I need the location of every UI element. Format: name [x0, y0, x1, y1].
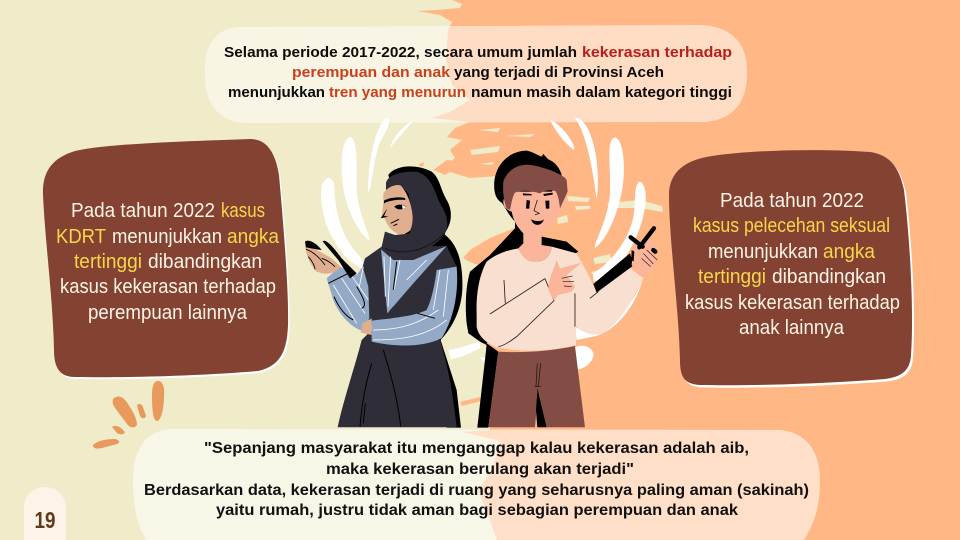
panel: right sexual harassment callout: kasus kekerasan terhadap — [685, 291, 900, 314]
icon: orange burst — [93, 381, 164, 449]
panel: right sexual harassment callout — [669, 150, 914, 388]
panel: top summary: tren yang menurun — [329, 84, 466, 101]
panel: right sexual harassment callout: Pada tahun 2022 — [720, 189, 864, 212]
panel: right sexual harassment callout: anak lainnya — [739, 316, 845, 339]
panel: left KDRT callout: kasus — [221, 199, 265, 222]
panel: top summary: kekerasan terhadap — [582, 44, 732, 61]
decorative white sound-wave curves — [321, 118, 646, 372]
panel: left KDRT callout: menunjukkan — [112, 225, 222, 248]
panel: top summary — [205, 25, 747, 123]
panel: left KDRT callout: tertinggi — [74, 250, 142, 273]
illustration: woman in hijab — [305, 166, 462, 428]
panel: left KDRT callout: kasus kekerasan terhadap — [60, 275, 276, 298]
panel: bottom quote: Berdasarkan data, kekerasan terjadi di ruang yang seharusnya paling aman (sakinah) — [144, 482, 809, 499]
panel: right sexual harassment callout: tertinggi — [698, 265, 766, 288]
panel: left KDRT callout — [43, 139, 290, 379]
page number tab — [24, 487, 66, 540]
panel: bottom quote: "Sepanjang masyarakat itu menganggap kalau kekerasan adalah aib, — [204, 440, 749, 457]
panel: bottom quote — [133, 429, 820, 540]
panel: top summary: menunjukkan — [228, 84, 325, 101]
panel: top summary: yang terjadi di Provinsi Aceh — [454, 64, 664, 81]
panel: bottom quote: maka kekerasan berulang akan terjadi" — [326, 461, 634, 478]
illustration: man with pen — [466, 151, 657, 428]
panel: top summary: perempuan dan anak — [292, 64, 451, 81]
panel: right sexual harassment callout: angka — [823, 240, 876, 263]
panel: left KDRT callout: Pada tahun 2022 — [71, 199, 215, 222]
panel: bottom quote: yaitu rumah, justru tidak aman bagi sebagian perempuan dan anak — [216, 502, 738, 519]
panel: right sexual harassment callout: kasus pelecehan seksual — [693, 214, 890, 237]
panel: right sexual harassment callout: dibandingkan — [772, 265, 886, 288]
panel: left KDRT callout: perempuan lainnya — [88, 301, 248, 324]
panel: left KDRT callout: dibandingkan — [148, 250, 262, 273]
page number tab: 19 — [34, 507, 56, 533]
panel: right sexual harassment callout: menunjukkan — [708, 240, 818, 263]
panel: left KDRT callout: angka — [227, 225, 280, 248]
panel: top summary: Selama periode 2017-2022, secara umum jumlah — [224, 44, 577, 61]
panel: left KDRT callout: KDRT — [56, 225, 106, 248]
panel: top summary: namun masih dalam kategori tinggi — [471, 84, 732, 101]
